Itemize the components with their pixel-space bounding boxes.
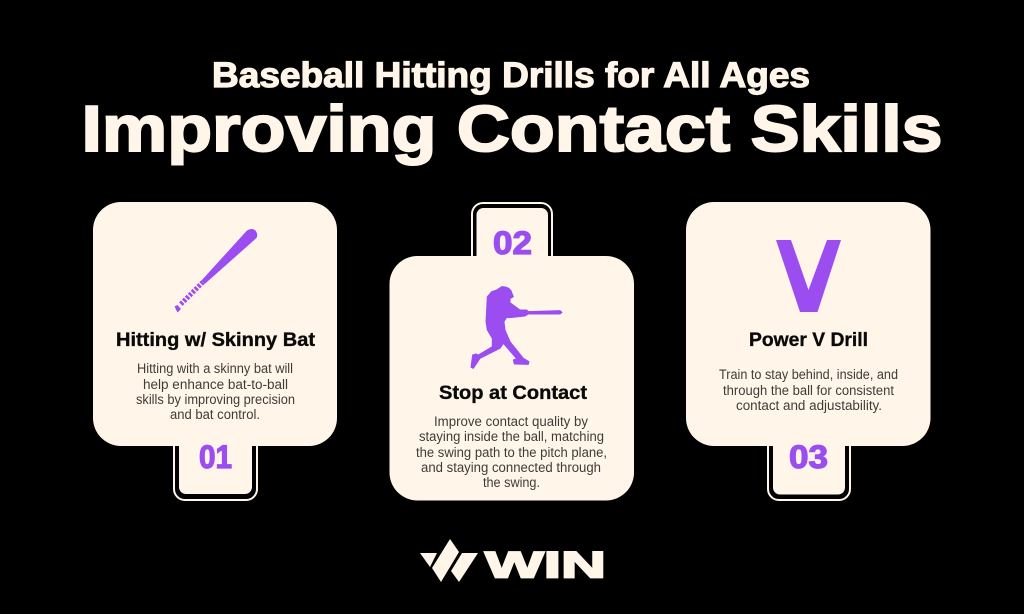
number 01: 01: [199, 439, 232, 475]
card 3 background: [686, 202, 930, 446]
icon: letter V: [776, 240, 841, 312]
card 3 heading: Power V Drill: [749, 329, 868, 351]
number tab 03: [768, 420, 850, 500]
card 1 background: [93, 202, 337, 446]
logo: WIN: [420, 539, 606, 586]
card 1 body text: skills by improving precision: [136, 392, 295, 407]
number 02: 02: [493, 225, 532, 261]
card 2 body text: Improve contact quality by: [434, 414, 588, 429]
logo mark: [420, 539, 478, 582]
card 2 body text: the swing path to the pitch plane,: [416, 445, 607, 460]
number 03: 03: [789, 439, 828, 475]
card 2 body text: and staying connected through: [421, 460, 601, 475]
card 3 body text: [719, 367, 898, 413]
subtitle heading: Baseball Hitting Drills for All Ages: [212, 56, 810, 95]
card 2 background: [390, 256, 634, 500]
main heading: Improving Contact Skills: [82, 92, 942, 165]
panel: hitting with skinny bat: [93, 202, 337, 500]
card 1 heading: Hitting w/ Skinny Bat: [116, 329, 316, 351]
card 1 body text: help enhance bat-to-ball: [143, 377, 288, 392]
panel: power v drill: [686, 202, 930, 500]
card 2 body text: staying inside the ball, matching: [419, 429, 604, 444]
icon: baseball bat: [174, 229, 257, 312]
card 2 body text: [416, 414, 607, 490]
card 2 body text: the swing.: [483, 475, 540, 490]
panel: stop at contact: [390, 203, 634, 500]
card 1 body text: [136, 361, 295, 422]
card 2 heading: Stop at Contact: [439, 382, 588, 404]
card 1 body text: Hitting with a skinny bat will: [137, 361, 293, 376]
title: [82, 56, 942, 165]
card 3 body text: Train to stay behind, inside, and: [719, 367, 898, 382]
icon: batter silhouette: [471, 287, 562, 368]
card 3 body text: through the ball for consistent: [723, 383, 894, 398]
card 3 body text: contact and adjustability.: [736, 398, 882, 413]
logo wordmark: WIN: [485, 544, 606, 586]
number tab 02: [472, 203, 552, 283]
number tab 01: [174, 420, 257, 500]
card 1 body text: and bat control.: [170, 407, 260, 422]
